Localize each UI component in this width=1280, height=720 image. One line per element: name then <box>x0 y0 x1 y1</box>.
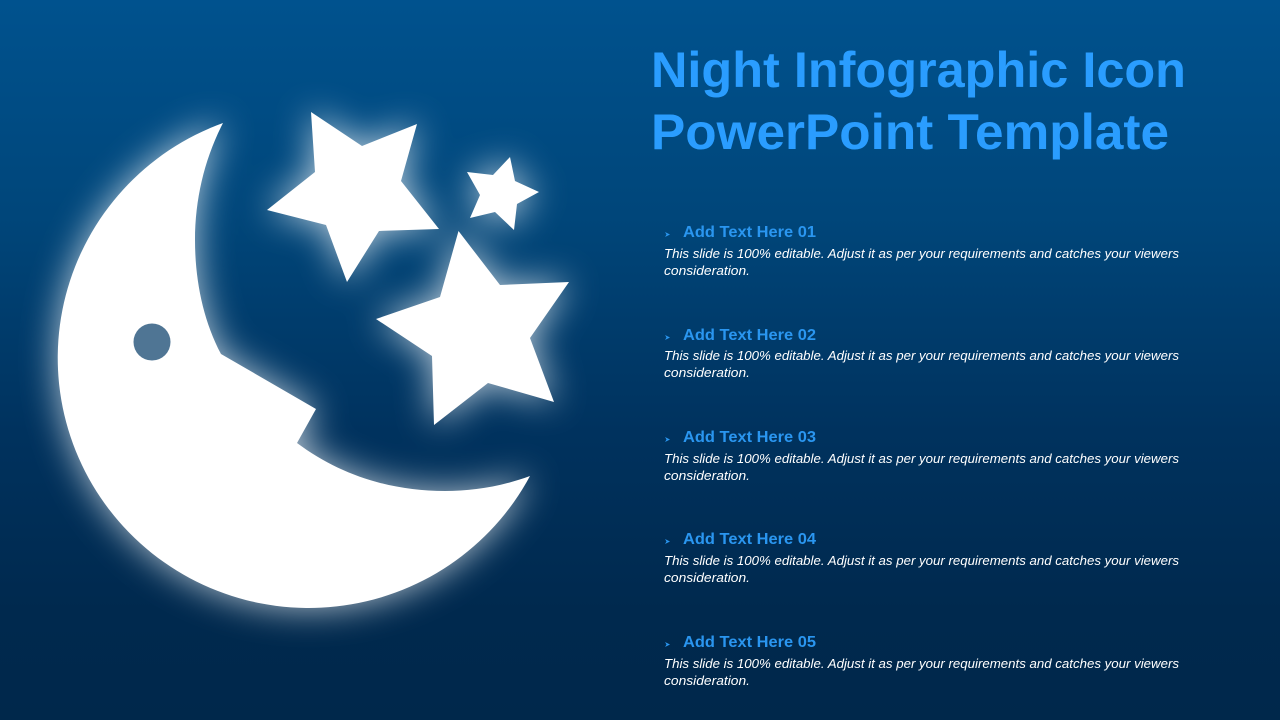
text block 01: consideration. <box>664 263 750 278</box>
text block 03: Add Text Here 03 <box>683 429 816 446</box>
text block 01: This slide is 100% editable. Adjust it as per your requirements and catches your viewers <box>664 246 1179 261</box>
title <box>651 42 1186 160</box>
moon and stars glow <box>58 112 569 608</box>
text block 04: consideration. <box>664 570 750 585</box>
text block 02: consideration. <box>664 365 750 380</box>
text block 03: This slide is 100% editable. Adjust it as per your requirements and catches your viewers <box>664 451 1179 466</box>
title: PowerPoint Template <box>651 104 1169 160</box>
text block 05: consideration. <box>664 673 750 688</box>
text block 04: Add Text Here 04 <box>683 531 816 548</box>
icon: small star <box>467 157 539 230</box>
icon: moon eye <box>134 324 170 360</box>
text block 03 <box>664 429 1179 483</box>
text block 02 <box>664 327 1179 380</box>
text block 02: Add Text Here 02 <box>683 327 816 344</box>
icon: large star <box>376 231 569 425</box>
text block 04: This slide is 100% editable. Adjust it as per your requirements and catches your viewers <box>664 553 1179 568</box>
text block 05 <box>664 634 1179 688</box>
text block 01 <box>664 224 1179 278</box>
text block 04 <box>664 531 1179 585</box>
text block 05: Add Text Here 05 <box>683 634 816 651</box>
text block 03: consideration. <box>664 468 750 483</box>
text block 05: This slide is 100% editable. Adjust it as per your requirements and catches your viewers <box>664 656 1179 671</box>
text block 01: Add Text Here 01 <box>683 224 816 241</box>
title: Night Infographic Icon <box>651 42 1186 98</box>
icon: crescent moon with face <box>58 123 530 608</box>
icon: upper star <box>267 112 439 282</box>
text block 02: This slide is 100% editable. Adjust it as per your requirements and catches your viewers <box>664 348 1179 363</box>
